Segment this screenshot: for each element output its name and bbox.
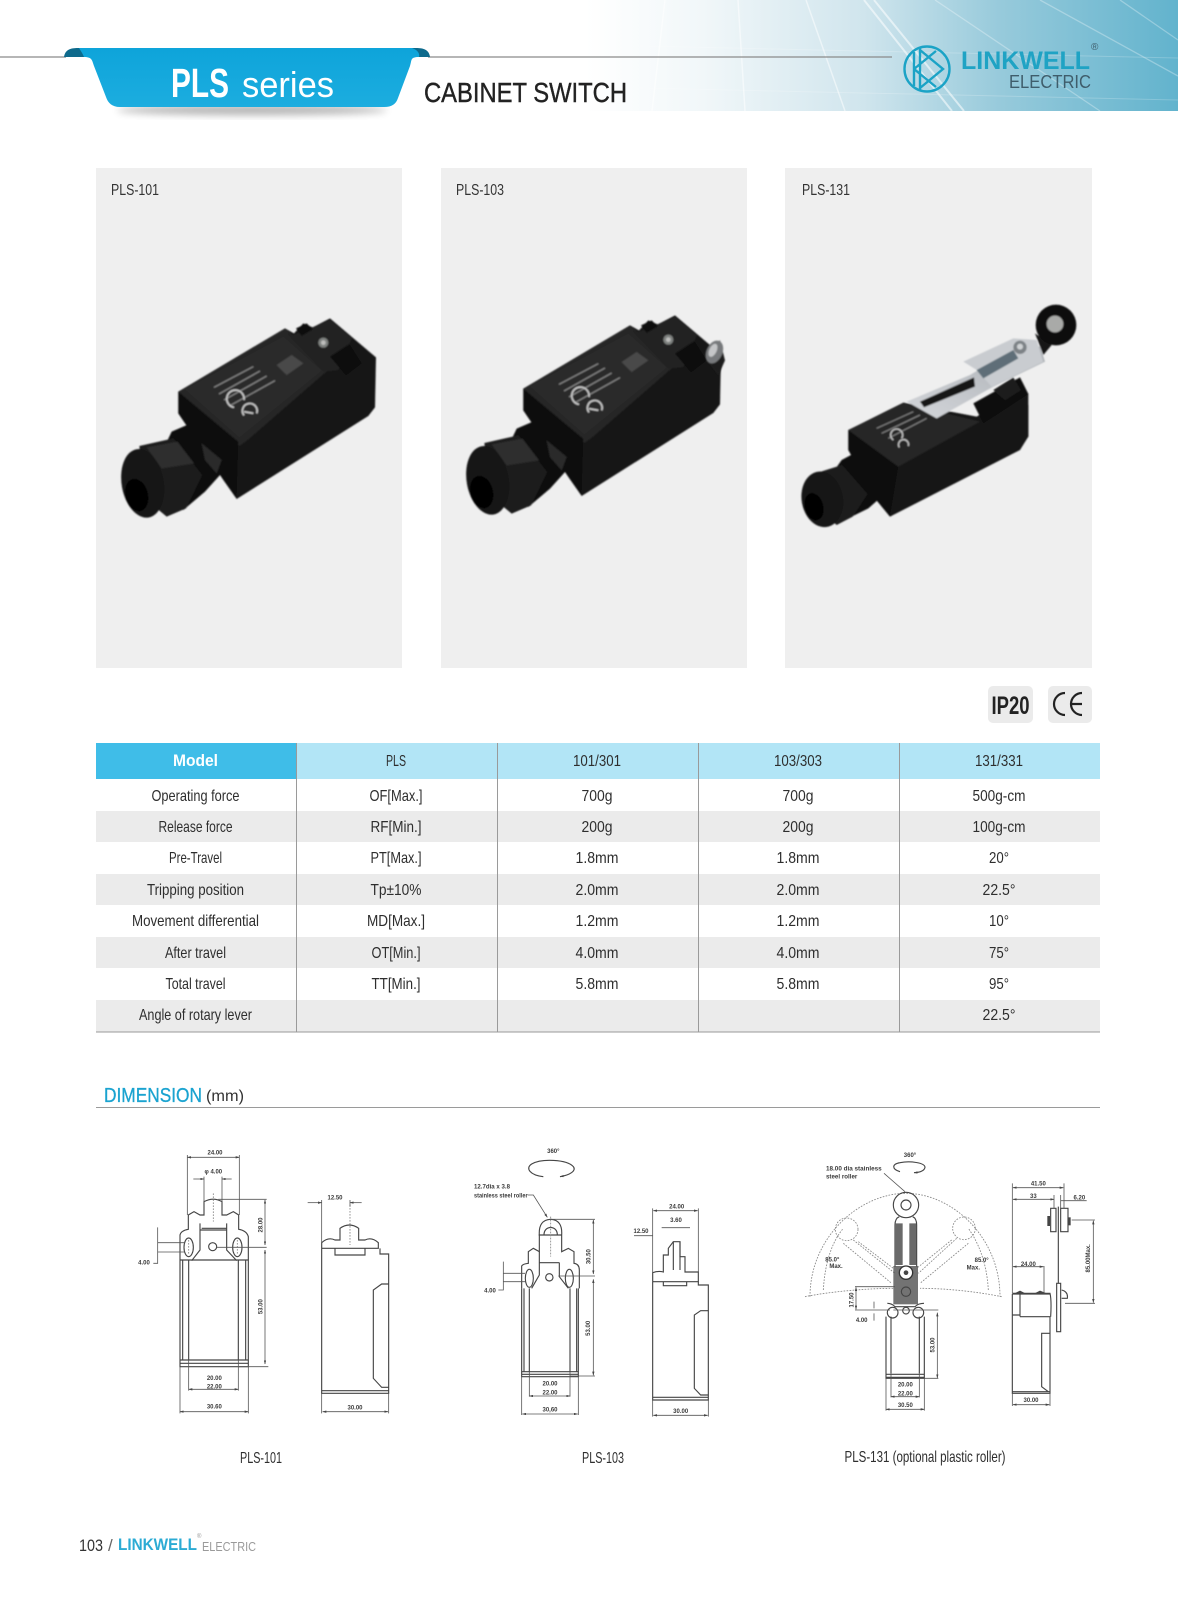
dimension values: 30.00 xyxy=(348,1405,363,1411)
caption: PLS-101: PLS-101 xyxy=(240,1450,282,1467)
table header: 131/331 xyxy=(975,753,1023,770)
dimension values: 85.00Max. xyxy=(1086,1244,1092,1272)
row: Tripping position: Tp±10% xyxy=(370,882,422,899)
photo: PLS-101 switch xyxy=(116,318,376,521)
row: Release force: RF[Min.] xyxy=(370,819,422,836)
dimension values: stainless steel roller xyxy=(474,1193,528,1199)
photo: PLS-103 switch xyxy=(461,315,727,518)
footer: page number and brand: ® xyxy=(197,1533,202,1540)
panel: PLS-101 product xyxy=(96,168,402,668)
dimension values: 4.00 xyxy=(856,1318,868,1324)
row: Tripping position xyxy=(147,882,1016,899)
row: Tripping position: 2.0mm xyxy=(576,882,618,899)
dimension values: 20.00 xyxy=(898,1382,913,1388)
dimension values: Max. xyxy=(829,1264,843,1270)
dimension values: 53.00 xyxy=(258,1299,264,1314)
row: Pre-Travel xyxy=(169,850,1009,867)
row: Total travel: 95° xyxy=(989,976,1009,993)
label: PLS-131: PLS-131 xyxy=(802,182,850,199)
row: Total travel xyxy=(166,976,1009,993)
dimension values: 30.00 xyxy=(1024,1398,1039,1404)
dimension values: 360° xyxy=(904,1153,917,1159)
dimension values: 20.00 xyxy=(543,1381,558,1387)
dimension values: φ 4.00 xyxy=(205,1169,223,1175)
row: Movement differential: 1.2mm xyxy=(776,913,820,930)
side view xyxy=(1012,1207,1071,1393)
photo: PLS-131 switch with lever xyxy=(797,305,1076,530)
dimension values: 22.00 xyxy=(543,1390,558,1396)
row: Total travel: TT[Min.] xyxy=(372,976,420,993)
row: Release force: 200g xyxy=(582,819,612,836)
series ribbon xyxy=(64,48,430,115)
swing arc xyxy=(805,1193,1002,1297)
table header: Model xyxy=(173,751,218,770)
header rule xyxy=(0,56,892,58)
footer: page number and brand: ELECTRIC xyxy=(202,1539,256,1554)
footer: page number and brand: LINKWELL xyxy=(118,1535,197,1554)
dimension values: 24.00 xyxy=(208,1151,223,1157)
dimension lines xyxy=(153,1155,389,1413)
logo: Linkwell Electric: LINKWELL xyxy=(961,47,1090,75)
row: After travel: 75° xyxy=(989,945,1009,962)
logo: Linkwell Electric xyxy=(904,42,1099,92)
row: Tripping position: 2.0mm xyxy=(776,882,820,899)
dimension values: 12.50 xyxy=(634,1229,649,1235)
dimension values: 360° xyxy=(547,1149,560,1155)
row: Total travel: 5.8mm xyxy=(576,976,618,993)
dimension values: 53.00 xyxy=(930,1337,936,1352)
dimension values xyxy=(138,1151,363,1411)
dimension values: Max. xyxy=(967,1265,980,1271)
dimension values: 24.00 xyxy=(669,1205,685,1211)
dimension values: 24.00 xyxy=(1021,1262,1036,1268)
row: Angle of rotary lever: Angle of rotary lever xyxy=(139,1007,253,1024)
series ribbon: series xyxy=(242,64,334,105)
logo: Linkwell Electric: ELECTRIC xyxy=(1009,72,1091,92)
table header xyxy=(96,743,1100,779)
row: Movement differential: Movement differential xyxy=(132,913,259,930)
dimension values: 33 xyxy=(1030,1194,1037,1200)
row: Operating force: 500g-cm xyxy=(972,788,1026,805)
row: After travel: 4.0mm xyxy=(776,945,820,962)
leader arrow xyxy=(528,1195,547,1217)
row: Operating force: OF[Max.] xyxy=(370,788,422,805)
row: Pre-Travel: 20° xyxy=(989,850,1009,867)
dimension values: 18.00 dia stainless xyxy=(826,1166,882,1172)
dimension values: 30.50 xyxy=(898,1403,913,1409)
label: PLS-101: PLS-101 xyxy=(111,182,159,199)
footer: page number and brand: / xyxy=(108,1536,113,1555)
lever and roller xyxy=(887,1192,924,1318)
row: Total travel: Total travel xyxy=(166,976,226,993)
logo: Linkwell Electric: ® xyxy=(1091,42,1099,53)
front view body xyxy=(886,1317,924,1378)
dimension values: 6.20 xyxy=(1074,1196,1086,1202)
section heading: dimension: (mm) xyxy=(206,1088,244,1105)
row: Pre-Travel: 1.8mm xyxy=(776,850,820,867)
row: Operating force: 700g xyxy=(582,788,612,805)
rotation arrow xyxy=(894,1162,925,1173)
table header: 103/303 xyxy=(774,753,822,770)
leader xyxy=(884,1173,905,1192)
header background: solar panel xyxy=(585,0,1178,111)
dimension values: 85.0° xyxy=(825,1257,840,1263)
dimension values: 4.00 xyxy=(484,1289,496,1295)
panel: PLS-103 product xyxy=(441,168,747,668)
series title: PLS xyxy=(171,60,229,106)
dimension values: 30.50 xyxy=(587,1249,593,1264)
rotation arrow xyxy=(529,1160,574,1177)
row: Angle of rotary lever: 22.5° xyxy=(982,1007,1016,1024)
side view xyxy=(653,1242,708,1400)
row: Tripping position: Tripping position xyxy=(147,882,244,899)
row: Release force: 200g xyxy=(782,819,814,836)
table header: PLS xyxy=(386,753,406,770)
row: After travel: OT[Min.] xyxy=(372,945,420,962)
row: Movement differential: MD[Max.] xyxy=(367,913,425,930)
row: Pre-Travel: PT[Max.] xyxy=(370,850,422,867)
dimension values: 4.00 xyxy=(138,1261,150,1267)
row: Movement differential: 10° xyxy=(989,913,1009,930)
row: After travel xyxy=(165,945,1009,962)
row: After travel: 4.0mm xyxy=(576,945,618,962)
caption: PLS-103: PLS-103 xyxy=(582,1450,624,1467)
badge: IP20 xyxy=(988,686,1033,723)
dimension values: 12.50 xyxy=(328,1195,343,1201)
dimension lines xyxy=(855,1183,1095,1411)
row: Operating force: Operating force xyxy=(152,788,240,805)
footer: page number and brand xyxy=(79,1533,256,1555)
dimension drawing: PLS-101 xyxy=(138,1151,389,1413)
side view xyxy=(322,1205,389,1393)
row: After travel: After travel xyxy=(165,945,226,962)
dimension values: 22.00 xyxy=(898,1391,913,1397)
caption: PLS-131: PLS-131 (optional plastic roller) xyxy=(844,1449,1006,1466)
dimension values: 12.7dia x 3.8 xyxy=(474,1185,511,1191)
row: Angle of rotary lever xyxy=(139,1007,1016,1024)
dimension values: 30,60 xyxy=(543,1407,558,1413)
panel: PLS-131 product xyxy=(785,168,1092,668)
row: Movement differential: 1.2mm xyxy=(576,913,618,930)
badge: IP20: IP20 xyxy=(992,692,1030,720)
row: Operating force xyxy=(152,788,1026,805)
row: Release force xyxy=(158,819,1026,836)
dimension values: 20.00 xyxy=(207,1376,222,1382)
dimension values: 30.60 xyxy=(207,1405,222,1411)
dimension lines xyxy=(498,1208,708,1417)
front view xyxy=(522,1217,579,1377)
dimension values: 28.00 xyxy=(259,1217,265,1232)
front view xyxy=(180,1193,248,1367)
footer: page number and brand: 103 xyxy=(79,1536,103,1555)
dimension values: 3.60 xyxy=(670,1218,682,1224)
dimension values xyxy=(474,1149,689,1415)
label: PLS-103: PLS-103 xyxy=(456,182,504,199)
badge: CE mark xyxy=(1048,686,1092,723)
row: Tripping position: 22.5° xyxy=(982,882,1016,899)
dimension values: 53.00 xyxy=(586,1320,592,1336)
row: Release force: Release force xyxy=(158,819,233,836)
dimension values: 41.50 xyxy=(1031,1181,1046,1187)
row: Total travel: 5.8mm xyxy=(776,976,820,993)
row: Release force: 100g-cm xyxy=(972,819,1026,836)
section heading: dimension: DIMENSION xyxy=(104,1085,202,1107)
dimension values: steel roller xyxy=(826,1175,858,1181)
row: Pre-Travel: Pre-Travel xyxy=(169,850,222,867)
dimension values: 30.00 xyxy=(673,1409,689,1415)
dimension values: 85.0° xyxy=(975,1258,989,1264)
dimension drawing: PLS-103 xyxy=(474,1149,708,1417)
specification table xyxy=(96,743,1100,1032)
dimension values xyxy=(825,1153,1092,1409)
dimension values: 22.00 xyxy=(207,1384,222,1390)
row: Operating force: 700g xyxy=(782,788,814,805)
dimension values: 17.50 xyxy=(849,1292,855,1307)
row: Movement differential xyxy=(132,913,1009,930)
table header: 101/301 xyxy=(573,753,621,770)
dimension drawing: PLS-131 xyxy=(805,1153,1095,1411)
page title: CABINET SWITCH xyxy=(424,77,627,108)
row: Pre-Travel: 1.8mm xyxy=(576,850,618,867)
